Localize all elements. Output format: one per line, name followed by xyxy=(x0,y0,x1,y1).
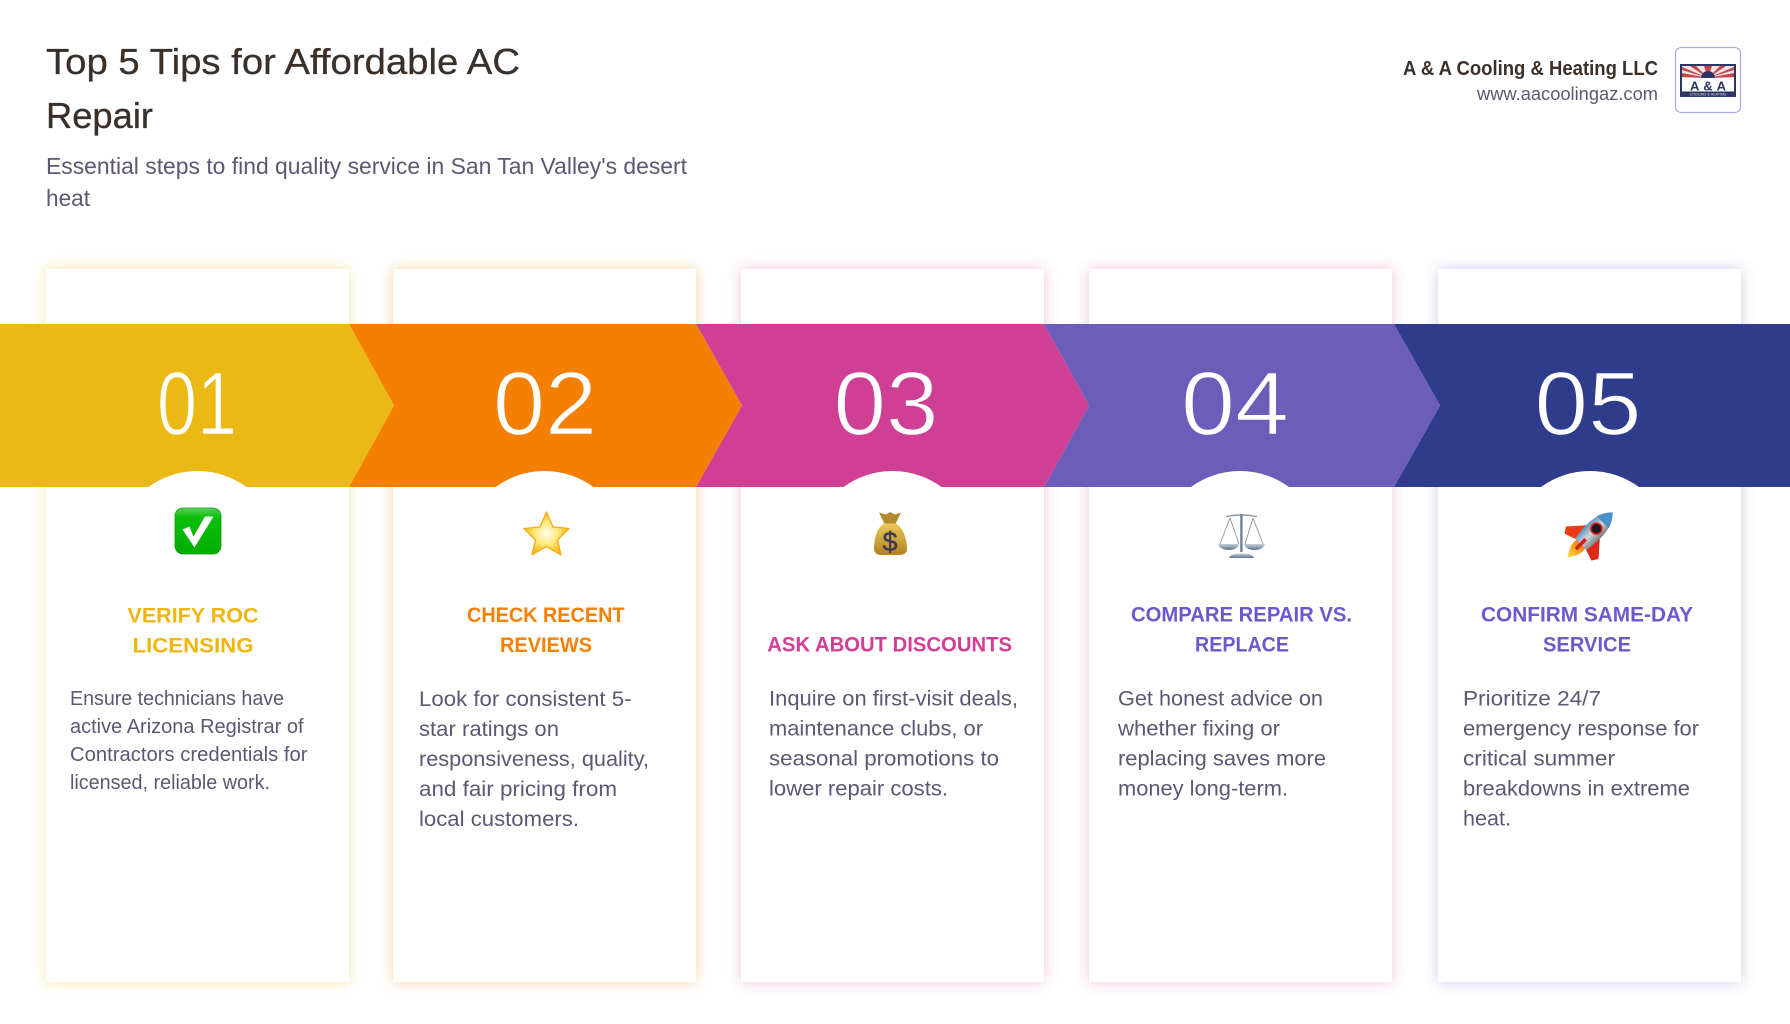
chevron 1 xyxy=(0,324,394,487)
body text 3: lower repair costs. xyxy=(769,777,948,801)
panel: step 4 compare repair vs replace xyxy=(1089,269,1392,982)
body text 2: and fair pricing from xyxy=(419,777,617,801)
title xyxy=(46,41,520,136)
body text 3 xyxy=(769,687,1018,801)
number 01: 01 xyxy=(157,354,237,454)
logo badge: COOLING & HEATING xyxy=(1690,93,1727,97)
panel: step 2 check recent reviews xyxy=(393,269,696,982)
heading 2: REVIEWS xyxy=(500,633,592,657)
number 04: 04 xyxy=(1181,354,1289,454)
body text 2 xyxy=(419,687,649,831)
circle notch 3 xyxy=(844,471,942,487)
body text 1: Contractors credentials for xyxy=(70,744,308,766)
body text 3: maintenance clubs, or xyxy=(769,717,983,741)
circle notch 4 xyxy=(1191,471,1289,487)
body text 5: heat. xyxy=(1463,807,1511,831)
logo badge: A&A xyxy=(1690,78,1727,94)
body text 3: Inquire on first-visit deals, xyxy=(769,687,1018,711)
company name and website xyxy=(1403,58,1658,104)
body text 1: active Arizona Registrar of xyxy=(70,716,304,738)
body text 5: breakdowns in extreme xyxy=(1463,777,1690,801)
body text 4: money long-term. xyxy=(1118,777,1288,801)
heading 2: CHECK RECENT xyxy=(467,603,624,627)
heading 4 xyxy=(1131,603,1352,657)
heading 1: VERIFY ROC xyxy=(128,604,258,628)
logo badge xyxy=(1676,48,1740,112)
chevron 3 xyxy=(696,324,1089,487)
body text 2: responsiveness, quality, xyxy=(419,747,649,771)
body text 5: emergency response for xyxy=(1463,717,1699,741)
panel: step 3 ask about discounts xyxy=(741,269,1044,982)
heading 1: LICENSING xyxy=(132,634,254,658)
subtitle xyxy=(46,153,687,211)
chevron band xyxy=(0,324,1790,487)
icon: balance scales xyxy=(1218,514,1265,558)
circle notch 1 xyxy=(148,471,246,487)
heading 2 xyxy=(467,603,624,657)
body text 2: Look for consistent 5- xyxy=(419,687,632,711)
body text 5: critical summer xyxy=(1463,747,1615,771)
body text 1 xyxy=(70,688,308,794)
icon: star xyxy=(524,512,569,555)
body text 2: star ratings on xyxy=(419,717,559,741)
title: Top 5 Tips for Affordable AC xyxy=(46,41,520,82)
heading 4: COMPARE REPAIR VS. xyxy=(1131,603,1352,627)
number 03: 03 xyxy=(834,354,938,454)
icon: money bag xyxy=(874,512,907,557)
icon: green check mark xyxy=(175,508,221,554)
subtitle: heat xyxy=(46,185,90,211)
number 05: 05 xyxy=(1534,354,1642,454)
body text 4: whether fixing or xyxy=(1117,717,1280,741)
panel: step 5 confirm same-day service xyxy=(1438,269,1741,982)
heading 4: REPLACE xyxy=(1195,633,1289,657)
body text 4: replacing saves more xyxy=(1118,747,1326,771)
body text 3: seasonal promotions to xyxy=(769,747,999,771)
body text 2: local customers. xyxy=(419,807,579,831)
panel: step 1 verify ROC licensing xyxy=(46,269,349,982)
chevron 2 xyxy=(349,324,742,487)
company name and website: www.aacoolingaz.com xyxy=(1476,84,1658,104)
circle notch 2 xyxy=(496,471,594,487)
body text 1: Ensure technicians have xyxy=(70,688,284,710)
heading 5: CONFIRM SAME-DAY xyxy=(1481,603,1693,627)
icon: money bag: $ xyxy=(882,527,898,557)
number 02: 02 xyxy=(493,354,597,454)
chevron 4 xyxy=(1044,324,1440,487)
heading 5: SERVICE xyxy=(1543,633,1631,657)
icon: rocket xyxy=(1551,496,1629,574)
company name and website: A & A Cooling & Heating LLC xyxy=(1403,58,1658,80)
heading 3: ASK ABOUT DISCOUNTS xyxy=(767,633,1012,657)
heading 5 xyxy=(1481,603,1693,657)
body text 1: licensed, reliable work. xyxy=(70,772,270,794)
body text 5 xyxy=(1463,687,1699,831)
body text 4 xyxy=(1117,687,1326,801)
chevron 5 xyxy=(1394,324,1790,487)
title: Repair xyxy=(46,95,153,136)
heading 1 xyxy=(128,604,258,658)
body text 4: Get honest advice on xyxy=(1118,687,1323,711)
subtitle: Essential steps to find quality service in San Tan Valley's desert xyxy=(46,153,687,179)
body text 5: Prioritize 24/7 xyxy=(1463,687,1601,711)
circle notch 5 xyxy=(1541,471,1639,487)
